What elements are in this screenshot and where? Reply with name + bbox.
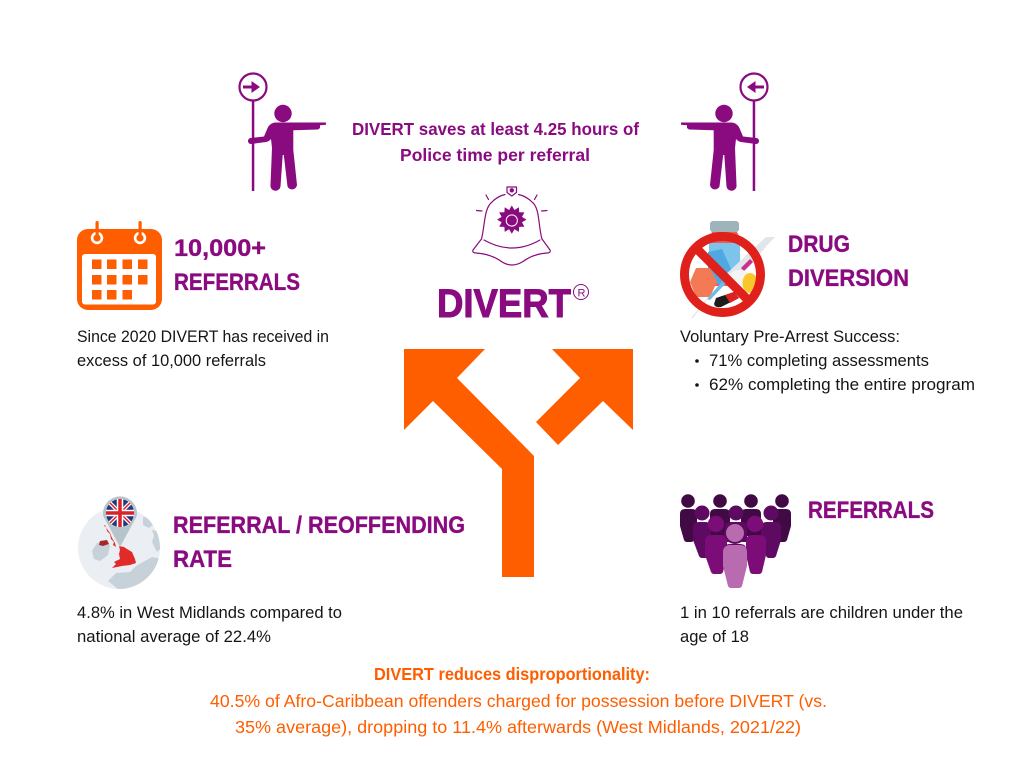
icon: person pointing left with sign [681, 74, 768, 191]
headline: police time saved: Police time per referral [400, 145, 590, 165]
text: referrals received: excess of 10,000 referrals [77, 351, 266, 370]
icon: police helmet [473, 187, 550, 265]
headline: police time saved: DIVERT saves at least 4.25 hours of [352, 119, 639, 139]
callout: disproportionality: 35% average), dropping to 11.4% afterwards (West Midlands, 2021/22) [235, 717, 801, 737]
heading: 10,000+ referrals [174, 235, 300, 296]
callout: disproportionality: DIVERT reduces disproportionality: [374, 664, 650, 684]
heading: 10,000+ referrals: 10,000+ [174, 235, 266, 262]
text: referrals received [77, 327, 329, 370]
text: voluntary pre-arrest success: 71% completing assessments [709, 351, 929, 370]
heading: 10,000+ referrals: REFERRALS [174, 269, 300, 296]
heading: referral / reoffending rate: RATE [173, 546, 232, 573]
text: reoffending comparison: national average of 22.4% [77, 627, 271, 646]
heading: referrals: REFERRALS [808, 497, 934, 524]
callout: disproportionality [210, 664, 827, 737]
icon: calendar [77, 221, 162, 310]
text: reoffending comparison: 4.8% in West Midlands compared to [77, 603, 342, 622]
text: voluntary pre-arrest success: Voluntary Pre-Arrest Success: [680, 327, 900, 346]
heading: referral / reoffending rate [173, 512, 465, 573]
icon: person pointing right with sign [240, 74, 326, 191]
logo: DIVERT wordmark: R [578, 288, 586, 300]
text: children referrals [680, 603, 963, 646]
text: children referrals: 1 in 10 referrals are children under the [680, 603, 963, 622]
heading: drug diversion: DIVERSION [788, 265, 909, 292]
heading: drug diversion: DRUG [788, 231, 850, 258]
icon: group of people [680, 494, 791, 588]
text: children referrals: age of 18 [680, 627, 749, 646]
arrow: diverging paths [404, 349, 633, 577]
headline: police time saved [352, 119, 639, 165]
logo: DIVERT wordmark: DIVERT [437, 282, 571, 326]
callout: disproportionality: 40.5% of Afro-Caribbean offenders charged for possession before DIVERT (vs. [210, 691, 827, 711]
heading: referral / reoffending rate: REFERRAL / REOFFENDING [173, 512, 465, 539]
text: voluntary pre-arrest success: 62% completing the entire program [709, 375, 975, 394]
heading: drug diversion [788, 231, 909, 292]
text: reoffending comparison [77, 603, 342, 646]
text: voluntary pre-arrest success [680, 327, 975, 394]
text: referrals received: Since 2020 DIVERT has received in [77, 327, 329, 346]
icon: no drugs sign [684, 221, 775, 318]
icon: UK map with flag pin [78, 496, 163, 589]
